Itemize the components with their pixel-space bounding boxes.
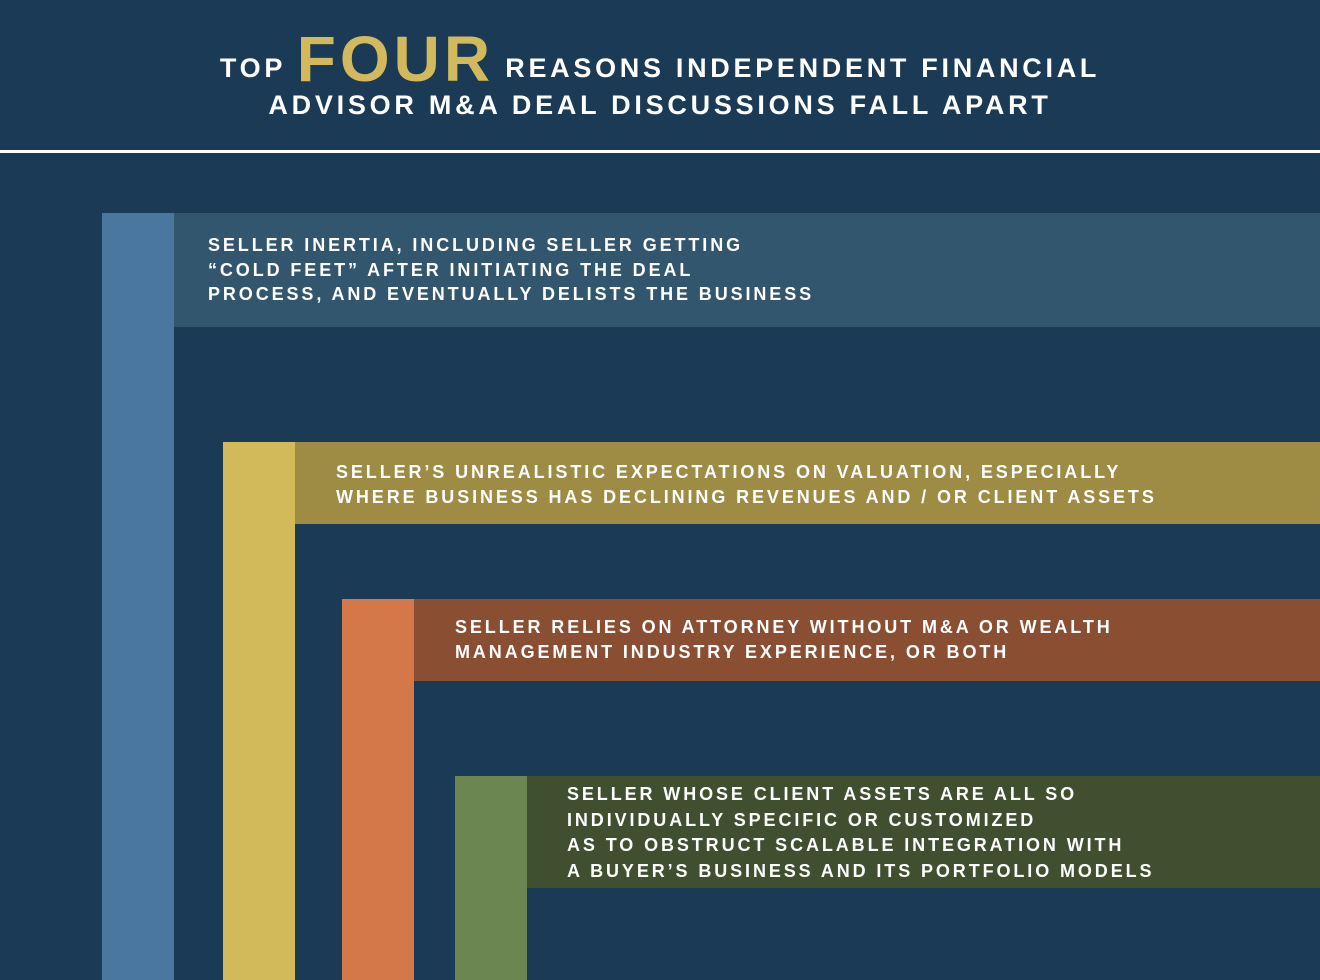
panel: reason 2 [295, 442, 1320, 524]
panel: reason 4 [527, 776, 1320, 888]
text: reason 3: MANAGEMENT INDUSTRY EXPERIENCE, OR BOTH [455, 642, 1009, 662]
title: TOP FOUR REASONS INDEPENDENT FINANCIAL [220, 23, 1100, 95]
text: reason 2: WHERE BUSINESS HAS DECLINING REVENUES AND / OR CLIENT ASSETS [336, 486, 1157, 506]
panel: reason 3 [414, 599, 1320, 681]
text: reason 1: “COLD FEET” AFTER INITIATING THE DEAL [208, 260, 693, 280]
bar: reason 4 [455, 776, 527, 980]
text: reason 4: INDIVIDUALLY SPECIFIC OR CUSTOMIZED [567, 810, 1036, 830]
title: ADVISOR M&A DEAL DISCUSSIONS FALL APART [268, 90, 1052, 120]
text: reason 3 [455, 617, 1113, 662]
text: reason 3: SELLER RELIES ON ATTORNEY WITHOUT M&A OR WEALTH [455, 617, 1113, 637]
bar: reason 2 [223, 442, 295, 980]
text: reason 4: A BUYER’S BUSINESS AND ITS PORTFOLIO MODELS [567, 860, 1154, 880]
text: reason 2: SELLER’S UNREALISTIC EXPECTATIONS ON VALUATION, ESPECIALLY [336, 462, 1121, 482]
text: reason 2 [336, 462, 1157, 506]
text: reason 1: SELLER INERTIA, INCLUDING SELLER GETTING [208, 235, 743, 255]
text: reason 4 [567, 784, 1154, 880]
bar: reason 3 [342, 599, 414, 980]
text: reason 4: SELLER WHOSE CLIENT ASSETS ARE ALL SO [567, 784, 1077, 804]
text: reason 1: PROCESS, AND EVENTUALLY DELISTS THE BUSINESS [208, 284, 814, 304]
text: reason 4: AS TO OBSTRUCT SCALABLE INTEGRATION WITH [567, 835, 1124, 855]
text: reason 1 [208, 235, 814, 304]
bar: reason 1 [102, 213, 174, 980]
panel: reason 1 [174, 213, 1320, 327]
